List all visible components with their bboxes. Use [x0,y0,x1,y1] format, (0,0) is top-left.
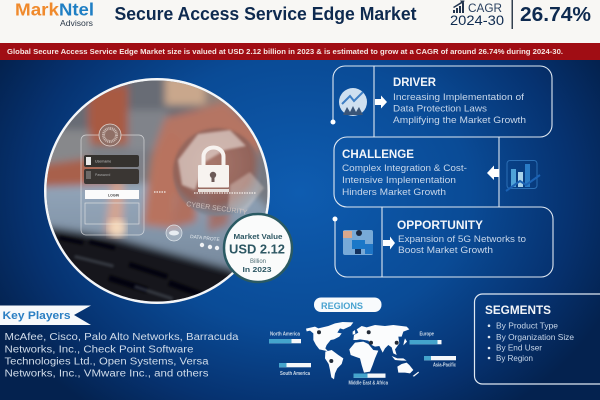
panel: opportunity: OPPORTUNITY [397,220,483,232]
key players text: Technologies Ltd., Open Systems, Versa [4,357,209,368]
key players text: Networks, Inc., Check Point Software [4,344,194,355]
region labels: Asia-Pacific [433,362,456,368]
panel: driver: Amplifying the Market Growth [393,115,526,126]
icon: opportunity person [343,230,373,255]
CAGR block [450,0,591,29]
CAGR block: 2024-30 [450,13,504,28]
panel: challenge [334,137,540,207]
hero photo circle: DATA PROTE [190,234,220,243]
panel: segments: SEGMENTS [485,305,551,317]
panel: segments [474,294,600,384]
key players ribbon [0,306,91,325]
panel: opportunity: Boost Market Growth [398,245,493,256]
login panel [81,124,144,235]
icon: growth bars [453,0,464,13]
panel: driver: DRIVER [393,77,437,89]
logo: MarkNtel Advisors: Ntel [59,0,94,20]
region labels: Middle East & Africa [348,381,388,387]
panel: challenge: Intensive Implementation [342,175,456,186]
panel: opportunity: Expansion of 5G Networks to [398,234,526,245]
key players text: Networks, Inc., VMware Inc., and others [4,369,208,380]
world map [269,322,456,387]
panel: challenge: CHALLENGE [342,149,414,161]
market value badge [224,214,292,282]
arrow [375,96,387,108]
logo: MarkNtel Advisors [15,0,94,28]
region bars [269,339,456,378]
market value badge: In 2023 [242,265,272,274]
fingertip glow [108,219,126,237]
header band [0,0,600,43]
red summary bar: Global Secure Access Service Edge Market size is valued at USD 2.12 billion in 2023 & is estimated to grow at a CAGR of around 26.74% during 2024-30. [7,47,563,56]
keyboard keys [59,236,204,298]
market value badge: USD 2.12 [229,242,285,256]
logo: MarkNtel Advisors: Advisors [60,19,93,28]
key players ribbon: Key Players [2,310,70,322]
region labels: North America [270,331,300,337]
panel: driver: Increasing Implementation of [393,92,524,103]
panel: driver [330,66,552,137]
panel: segments: By End User [496,343,542,353]
panel: segments: By Region [496,353,533,363]
regions pill: REGIONS [321,301,363,312]
logo: MarkNtel Advisors: Mark [15,0,59,20]
panel: segments: By Organization Size [496,332,574,342]
regions pill [314,298,382,312]
icon: challenge chart [506,160,540,191]
pins [317,330,399,363]
login panel: Username [95,160,111,164]
panel: challenge: Complex Integration & Cost- [342,163,467,174]
key players text [4,332,239,380]
key players text: McAfee, Cisco, Palo Alto Networks, Barracuda [4,332,239,343]
panel: segments: By Product Type [496,320,558,330]
panel: driver: Data Protection Laws [393,104,487,114]
region labels [270,331,456,387]
arrow [487,166,499,180]
red summary bar [0,43,600,60]
login panel: Password [95,173,110,177]
region labels: South America [280,371,310,377]
CAGR block: CAGR [468,1,502,15]
login panel: LOGIN [108,194,120,198]
icon: driver chart [339,88,367,116]
panel: opportunity [332,207,553,277]
icon: fingerprint [99,124,121,146]
CAGR block: 26.74% [520,3,591,26]
hero photo circle [44,78,270,304]
market value badge: Market Value [234,232,282,241]
hero photo circle: CYBER SECURITY [186,201,248,217]
title: Secure Access Service Edge Market [114,3,416,24]
cloud [166,225,182,241]
market value badge: Billion [250,259,266,265]
icon: padlock [198,148,229,192]
region labels: Europe [420,332,434,338]
globe [173,128,261,216]
arrow [383,236,395,250]
panel: challenge: Hinders Market Growth [342,187,446,198]
